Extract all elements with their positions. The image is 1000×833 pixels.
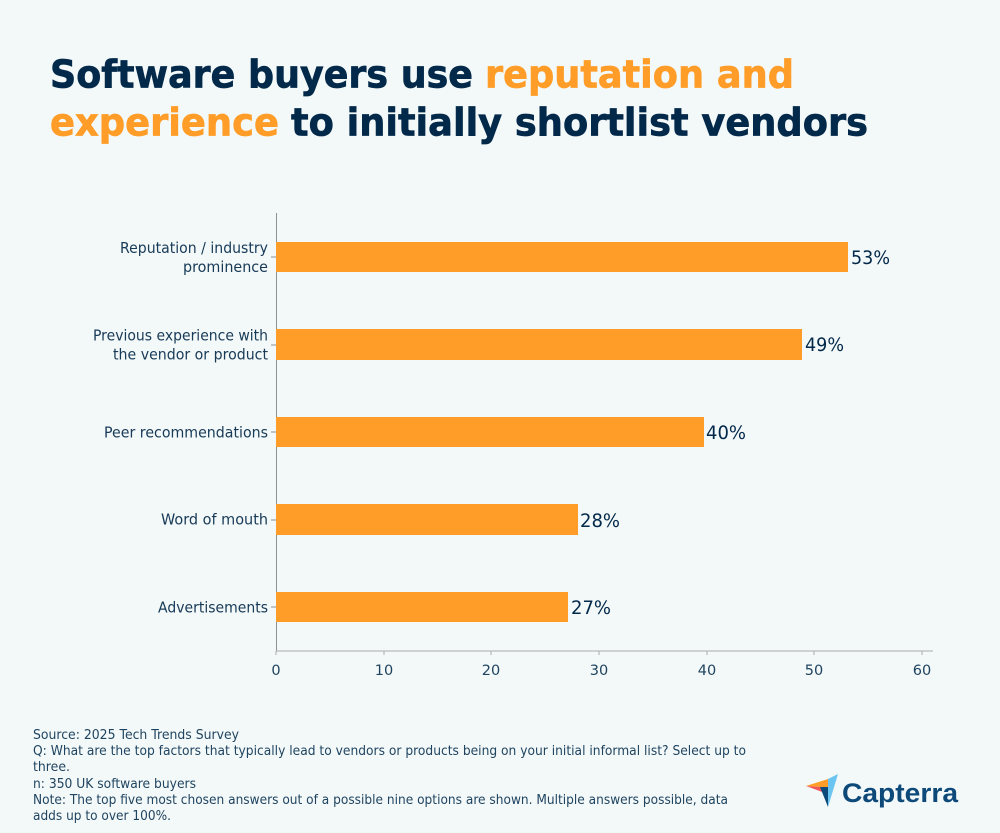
source note: adds up to over 100%. bbox=[33, 808, 171, 824]
title: reputation and bbox=[485, 52, 794, 96]
x axis bbox=[276, 651, 933, 655]
bar: reputation bbox=[120, 239, 890, 276]
bar: peer recommendations: Peer recommendations bbox=[104, 424, 268, 442]
bar chart bbox=[93, 213, 933, 679]
title: experience bbox=[50, 100, 279, 144]
x axis labels: 20 bbox=[482, 663, 500, 679]
bar: previous experience bbox=[93, 326, 844, 364]
source note: Note: The top five most chosen answers out of a possible nine options are shown. Multiple answers possible, data bbox=[33, 792, 728, 808]
x axis labels bbox=[271, 663, 931, 679]
icon: Capterra logo: Capterra bbox=[842, 778, 959, 808]
bar: advertisements: Advertisements bbox=[158, 598, 268, 616]
source note bbox=[33, 727, 746, 824]
bar: reputation: Reputation / industry bbox=[120, 239, 268, 257]
x axis labels: 10 bbox=[375, 663, 393, 679]
icon: Capterra logo bbox=[806, 774, 959, 808]
title: Software buyers use bbox=[50, 52, 473, 96]
source note: Source: 2025 Tech Trends Survey bbox=[33, 727, 239, 743]
title bbox=[50, 52, 868, 144]
source note: Q: What are the top factors that typically lead to vendors or products being on your initial informal list? Select up to bbox=[33, 743, 746, 759]
y axis bbox=[271, 213, 276, 651]
x axis labels: 30 bbox=[590, 663, 608, 679]
x axis labels: 0 bbox=[271, 663, 281, 679]
bar: advertisements: 27% bbox=[571, 597, 611, 619]
x axis labels: 50 bbox=[805, 663, 823, 679]
title: to initially shortlist vendors bbox=[291, 100, 868, 144]
bar: peer recommendations bbox=[104, 417, 746, 447]
bar: previous experience: Previous experience with bbox=[93, 326, 268, 344]
bar: peer recommendations: 40% bbox=[706, 422, 746, 444]
bar: word of mouth: Word of mouth bbox=[161, 510, 268, 528]
bar: reputation: 53% bbox=[851, 247, 890, 269]
source note: three. bbox=[33, 759, 70, 775]
x axis labels: 60 bbox=[913, 663, 931, 679]
bar: advertisements bbox=[158, 592, 611, 622]
source note: n: 350 UK software buyers bbox=[33, 776, 196, 792]
bar: previous experience: the vendor or product bbox=[113, 346, 268, 364]
x axis labels: 40 bbox=[698, 663, 716, 679]
bar: word of mouth: 28% bbox=[580, 510, 620, 532]
bar: previous experience: 49% bbox=[805, 334, 844, 356]
bar: reputation: prominence bbox=[183, 258, 268, 276]
bar: word of mouth bbox=[161, 504, 620, 535]
